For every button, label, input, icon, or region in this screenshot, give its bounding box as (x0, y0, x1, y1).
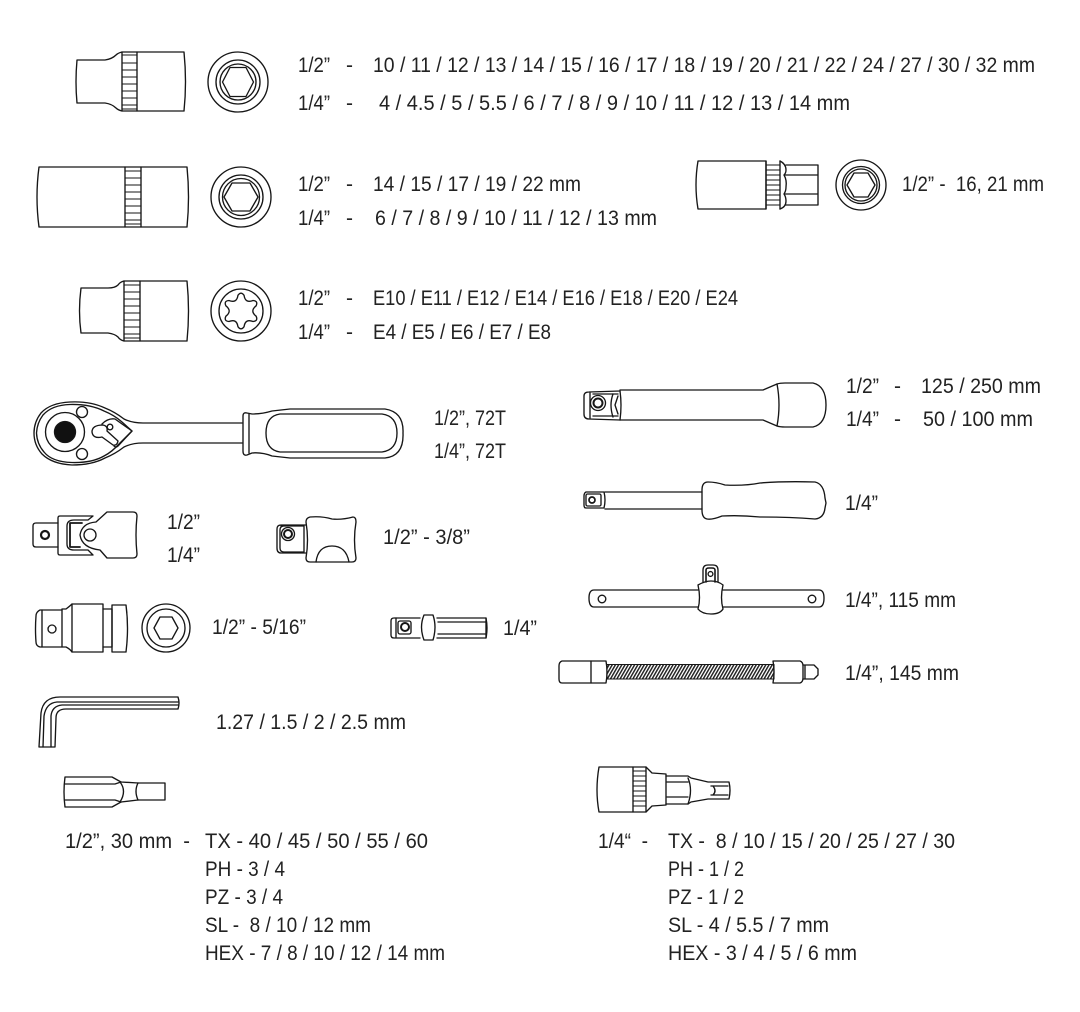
spec: reducer adapter: 1/2” - 3/8” (383, 526, 470, 549)
spec: universal joint: 1/2” (167, 511, 200, 534)
icon: extension bar (584, 383, 826, 427)
spec: extension bars: 125 / 250 mm (921, 375, 1041, 398)
spec: flexible extension: 1/4”, 145 mm (845, 662, 959, 685)
spec: 1/2 bits list: TX - 40 / 45 / 50 / 55 / 60 (205, 830, 428, 853)
spec: 1/4 bits list: PH - 1 / 2 (668, 858, 744, 881)
icon: ratchet handle (34, 402, 403, 465)
spec: 1/4 bits list: TX - 8 / 10 / 15 / 20 / 25 / 27 / 30 (668, 830, 955, 853)
spec: deep sockets 1/4: 1/4” (298, 207, 330, 230)
spec: torx sockets 1/4: - (346, 321, 353, 344)
spec: torx sockets 1/2: - (346, 287, 353, 310)
spec: torx sockets 1/4: E4 / E5 / E6 / E7 / E8 (373, 321, 551, 344)
spec: universal joint: 1/4” (167, 544, 200, 567)
spec: torx sockets 1/2: 1/2” (298, 287, 330, 310)
spec: spinner handle: 1/4” (845, 492, 878, 515)
spec: extension bars: 50 / 100 mm (923, 408, 1033, 431)
spec: 1/4 bits list: PZ - 1 / 2 (668, 886, 744, 909)
spec: standard sockets 1/2: 1/2” (298, 54, 330, 77)
spec: 1/2 bits list: PZ - 3 / 4 (205, 886, 283, 909)
spec: extension bars: 1/2” (846, 375, 879, 398)
icon: deep socket side view (37, 167, 188, 227)
spec: torx sockets 1/4: 1/4” (298, 321, 330, 344)
icon: spinner handle (584, 482, 826, 519)
spec: 1/2 bits list (205, 830, 445, 965)
spec: T-bar: 1/4”, 115 mm (845, 589, 956, 612)
icon: torx bit socket (597, 767, 730, 812)
icon: sliding T-bar (589, 565, 824, 614)
icon: bit adapter side view (36, 604, 128, 652)
spec: 1/2 bits list: PH - 3 / 4 (205, 858, 285, 881)
icon: screwdriver bit (64, 777, 165, 807)
icon: flexible extension (559, 661, 818, 683)
icon: bit adapter end view (142, 604, 190, 652)
spec: hex keys: 1.27 / 1.5 / 2 / 2.5 mm (216, 711, 406, 734)
icon: spark plug socket side view (696, 161, 818, 209)
spec: universal joint (167, 511, 200, 567)
spec: 1/4 bits list: SL - 4 / 5.5 / 7 mm (668, 914, 829, 937)
spec: extension bars: 1/4” (846, 408, 879, 431)
spec: hex shank adapter: 1/4” (503, 617, 537, 640)
spec: bit adapter: 1/2” - 5/16” (212, 616, 306, 639)
spec: deep sockets 1/4: 6 / 7 / 8 / 9 / 10 / 11 / 12 / 13 mm (375, 207, 657, 230)
spec: deep sockets 1/4: - (346, 207, 353, 230)
spec: torx sockets 1/2: E10 / E11 / E12 / E14 / E16 / E18 / E20 / E24 (373, 287, 738, 310)
spec: 1/2 bits lead: 1/2”, 30 mm - (65, 830, 190, 853)
icon: spark plug socket end view (836, 160, 886, 210)
spec: extension bars: - (894, 375, 901, 398)
spec: 1/2 bits list: SL - 8 / 10 / 12 mm (205, 914, 371, 937)
spec: deep sockets 1/2 (298, 173, 581, 196)
spec: standard sockets 1/2: 10 / 11 / 12 / 13 / 14 / 15 / 16 / 17 / 18 / 19 / 20 / 21 / 22 / 24 / 27 / 30 / 32 mm (373, 54, 1035, 77)
spec: ratchet: 1/4”, 72T (434, 440, 506, 463)
spec: ratchet: 1/2”, 72T (434, 407, 506, 430)
spec: extension bars (846, 375, 1041, 431)
spec: spark plug sockets: 1/2” - 16, 21 mm (902, 173, 1044, 196)
spec: 1/4 bits lead: 1/4“ - (598, 830, 648, 853)
spec: 1/4 bits list: HEX - 3 / 4 / 5 / 6 mm (668, 942, 857, 965)
icon: torx socket end view (211, 281, 271, 341)
icon: standard socket side view (76, 52, 186, 111)
spec: 1/4 bits list (668, 830, 955, 965)
icon: standard socket end view (208, 52, 268, 112)
spec: standard sockets 1/4: 1/4” (298, 92, 330, 115)
spec: deep sockets 1/2: 1/2” (298, 173, 330, 196)
icon: reducer adapter (277, 517, 356, 562)
icon: hex key (39, 697, 179, 747)
spec: ratchet (434, 407, 506, 463)
spec: standard sockets 1/4: - (346, 92, 353, 115)
spec: extension bars: - (894, 408, 901, 431)
spec: deep sockets 1/2: 14 / 15 / 17 / 19 / 22 mm (373, 173, 581, 196)
spec: torx sockets 1/4 (298, 321, 551, 344)
icon: torx socket side view (80, 281, 188, 341)
icon: deep socket end view (211, 167, 271, 227)
icon: hex shank adapter (391, 615, 487, 640)
icon: universal joint (33, 512, 137, 558)
spec: standard sockets 1/2: - (346, 54, 353, 77)
spec: deep sockets 1/2: - (346, 173, 353, 196)
spec: standard sockets 1/4: 4 / 4.5 / 5 / 5.5 / 6 / 7 / 8 / 9 / 10 / 11 / 12 / 13 / 14 mm (379, 92, 850, 115)
spec: 1/2 bits list: HEX - 7 / 8 / 10 / 12 / 14 mm (205, 942, 445, 965)
